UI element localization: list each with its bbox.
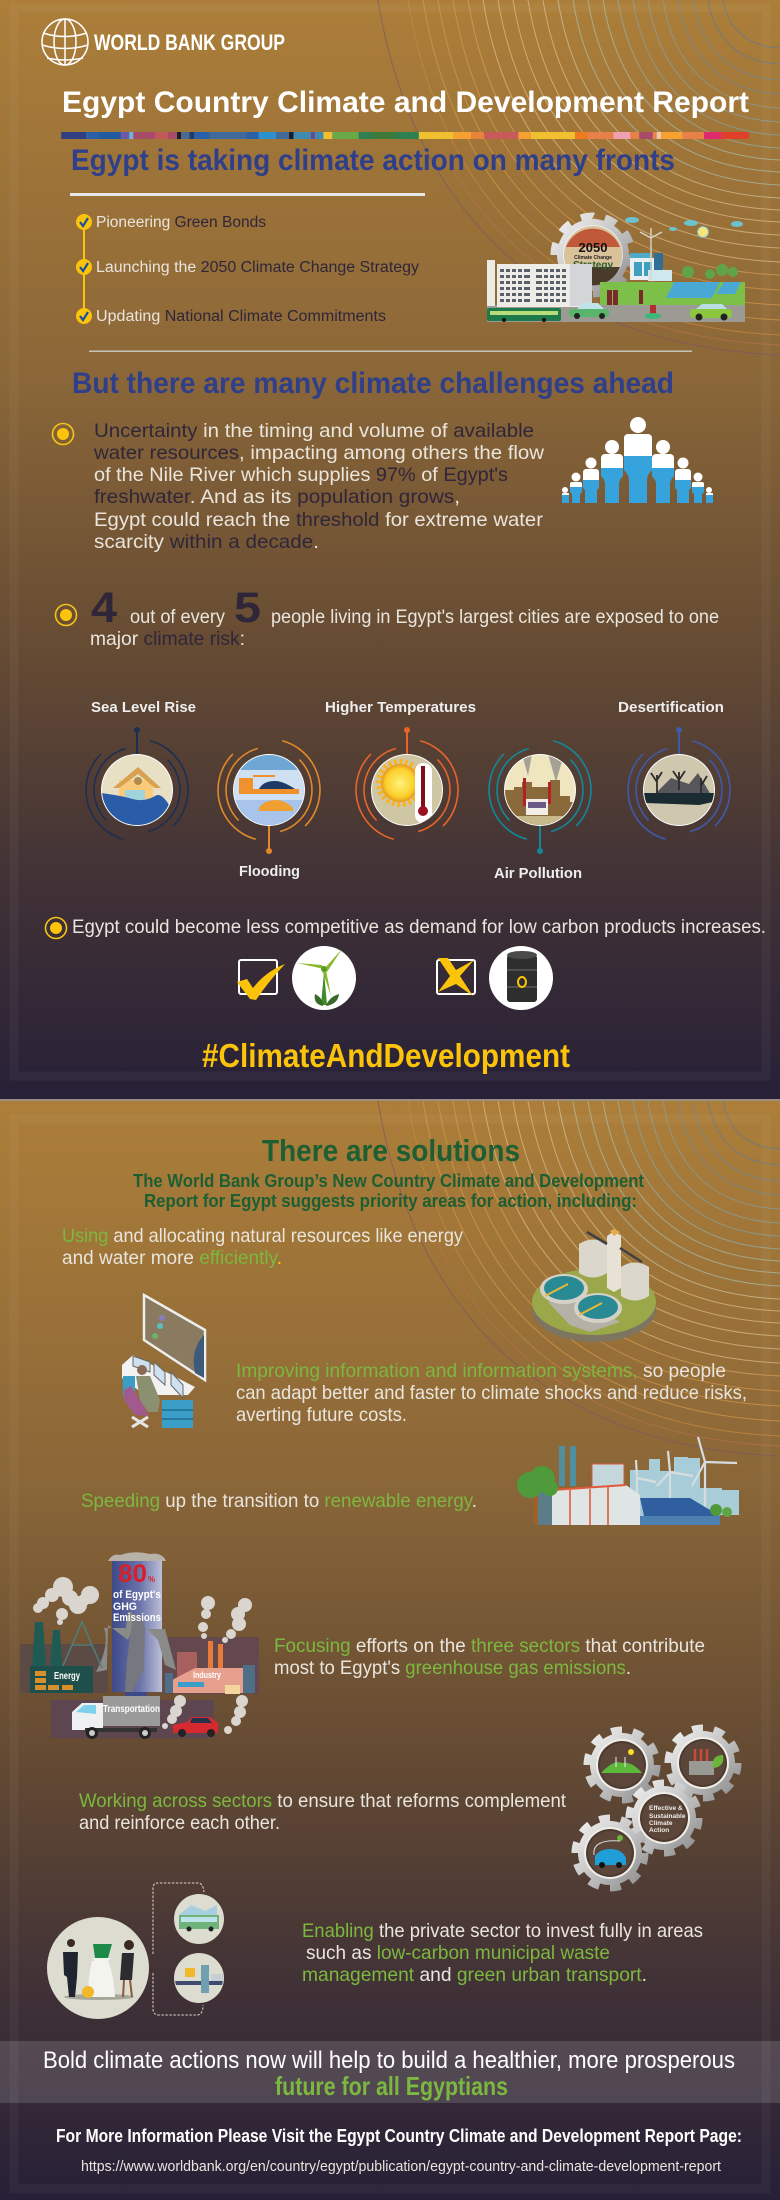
risk: air pollution: Air Pollution [494,865,582,882]
eco building [630,253,672,281]
heading underline [70,193,425,196]
hashtag: #ClimateAndDevelopment [202,1037,570,1074]
emissions tower: of Egypt's [113,1589,161,1601]
icon: gear: Climate Change [574,255,612,261]
frame: bottom panel [14,1119,766,2189]
panel: solutions background [0,1101,780,2200]
icon: gear: 2050 [579,240,607,255]
red car [173,1717,218,1737]
illustration: 2050 strategy city [487,217,745,322]
risk: desertification: Desertification [618,699,724,716]
truck: Transportation [103,1704,160,1715]
panel: climate challenges background [0,0,780,1100]
logo: World Bank Group [42,19,285,65]
icon: oil barrel [489,946,553,1010]
gear: green industry [669,1729,737,1797]
icon: gear [555,217,631,293]
text: competitiveness: Egypt could become less competitive as demand for low carbon products increases. [72,917,766,938]
clarifier 2 [574,1293,622,1323]
smoke: vehicles [162,1695,248,1734]
skyline [630,1457,739,1525]
text: renewable transition: Speeding up the transition to renewable energy. [81,1490,477,1512]
text: private sector: Enabling the private sector to invest fully in areas [302,1920,703,1942]
emissions tower: % [148,1575,155,1584]
section divider [89,350,692,352]
truck [72,1696,160,1739]
gear: climate action: Sustainable [649,1813,686,1820]
stat: 4 out of 5 people [90,584,719,650]
ground [600,282,745,308]
text block: water scarcity: scarcity within a decade . [94,531,319,553]
clarifier 1 [540,1274,588,1304]
desk [122,1355,195,1395]
industry plant [165,1641,255,1694]
stat: 4 out of 5 people: major climate risk: [90,628,245,650]
frame: top panel [14,8,766,1076]
text block: water scarcity: water resources , impacting among others the flow [93,442,545,464]
text: private sector: management and green urban transport. [302,1964,647,1986]
gear: climate action [630,1784,698,1852]
emissions tower: Emissions [113,1612,161,1624]
text: working across sectors: Working across sectors to ensure that reforms complement [79,1790,567,1812]
heading: challenges: But there are many climate challenges ahead [72,367,674,400]
text: information systems: averting future costs. [236,1404,407,1426]
silos [579,1229,649,1300]
item: strategy: Launching the 2050 Climate Change Strategy [96,259,419,276]
gear: climate action: Climate [649,1820,673,1827]
solar array [640,1498,720,1516]
heading: climate action: Egypt is taking climate action on many fronts [71,144,675,177]
solar panels [666,282,741,298]
scooter and people [607,290,661,319]
smoke: energy [33,1577,99,1625]
report URL: https://www.worldbank.org/en/country/egypt/publication/egypt-country-and-climate-development-report [81,2158,722,2175]
item: green bonds: Pioneering Green Bonds [96,214,266,231]
text: information systems: Improving information and information systems, so people [236,1360,726,1382]
icon: bullet water [52,424,74,444]
gear: renewables [588,1731,656,1799]
road [487,305,745,322]
icon: people filled with water [562,417,713,503]
small circle: municipal waste [174,1953,224,2003]
text: private sector [302,1920,703,1986]
icon: gear: Strategy [573,260,613,271]
clouds [625,217,743,231]
subheading: priority areas [133,1170,644,1211]
icon: check 1 [76,214,92,230]
subheading: priority areas: Report for Egypt suggests priority areas for action, including: [144,1190,637,1211]
risk: higher temperatures: Higher Temperatures [325,699,476,716]
monitors [133,1356,183,1398]
stat: 4 out of 5 people: people living in Egypt's largest cities are exposed to one [271,606,719,628]
trees [682,264,738,279]
energy backdrop [20,1644,108,1693]
factory [592,1464,624,1488]
emissions tower: GHG [113,1601,137,1613]
rainbow colour bar [61,132,749,139]
gear: electric car [576,1819,644,1887]
green car [569,303,609,319]
risk: air pollution [488,740,592,878]
wall display [144,1295,205,1380]
text block: water scarcity [93,420,545,553]
light green car [690,304,732,320]
text block: water scarcity: Uncertainty in the timing and volume of available [94,420,534,442]
illustration: renewable energy site [517,1437,739,1525]
smoke: industry [198,1596,252,1643]
risk: flooding [217,740,321,879]
emissions tower [96,1552,176,1700]
text: private sector: such as low-carbon municipal waste [306,1942,610,1964]
top contour lines [378,0,780,355]
illustration: emissions sectors [20,1552,259,1739]
item: commitments: Updating National Climate Commitments [96,308,386,325]
risk: sea level rise: Sea Level Rise [91,699,196,716]
risk: sea level rise [85,701,196,840]
text: three sectors [274,1635,705,1679]
banner: closing message: future for all Egyptians [275,2071,508,2101]
banner: closing message [0,2041,780,2103]
wind turbine [640,228,662,280]
icon: check 3 [76,308,92,324]
stat: 4 out of 5 people: 5 [234,584,261,632]
large investor circle [47,1917,149,2019]
text: three sectors: most to Egypt's greenhouse gas emissions. [274,1657,631,1679]
text block: water scarcity: of the Nile River which supplies 97% of Egypt's [94,464,508,486]
title: Egypt Country Climate and Development Report [62,86,749,119]
icon: bullet competitiveness [46,918,66,938]
tram [487,308,561,322]
panel divider line [0,1099,780,1101]
icon: bullet cities [56,604,76,626]
text: working across sectors [79,1790,567,1834]
energy plant: Energy [54,1671,80,1682]
risk: flooding: Flooding [239,863,300,880]
tree [534,1495,538,1525]
illustration: interlocking gears [576,1729,737,1887]
transport backdrop [51,1700,214,1738]
industry backdrop [163,1637,259,1694]
energy plant [30,1622,102,1693]
subheading: priority areas: The World Bank Group’s New Country Climate and Development [133,1170,644,1191]
text: three sectors: Focusing efforts on the three sectors that contribute [274,1635,705,1657]
operator [137,1365,147,1375]
text: efficient use: Using and allocating natural resources like energy [62,1225,463,1247]
text: information systems [236,1360,747,1426]
logo: World Bank Group: WORLD BANK GROUP [94,30,285,55]
text: efficient use: and water more efficiently. [62,1247,282,1269]
gear: climate action: Effective & [649,1805,683,1812]
icon: checked box [237,960,285,1000]
stat: 4 out of 5 people: 4 [91,584,117,632]
icon: check 2 [76,259,92,275]
dashed connector [153,1883,204,2015]
text: information systems: can adapt better and faster to climate shocks and reduce risks, [236,1382,747,1404]
tower block [487,260,592,307]
text: efficient use [62,1225,463,1269]
icon: crossed box [437,958,475,996]
turbines [636,1437,737,1520]
gear: climate action: Action [649,1827,669,1834]
industry plant: Industry [193,1670,222,1681]
text: working across sectors: and reinforce each other. [79,1812,280,1834]
sun [698,226,708,238]
small circle: green transport [174,1894,224,1944]
text block: water scarcity: Egypt could reach the threshold for extreme water [94,509,544,531]
emissions tower: 80 [118,1560,147,1588]
risk: higher temperatures [326,701,476,840]
illustration: control room [122,1295,205,1428]
illustration: water treatment plant [532,1229,656,1342]
heading: solutions: There are solutions [262,1133,520,1168]
banner: closing message: Bold climate actions now will help to build a healthier, more prosperous [43,2047,735,2074]
illustration: private sector investment [47,1883,224,2019]
text block: water scarcity: freshwater . And as its population grows , [94,486,460,508]
chimneys [559,1446,565,1486]
checklist of climate actions [76,214,419,325]
stat: 4 out of 5 people: out of every [130,606,225,628]
icon: wind turbine [292,946,356,1010]
risk: desertification [619,701,731,840]
solutions contour lines [378,1101,780,1456]
